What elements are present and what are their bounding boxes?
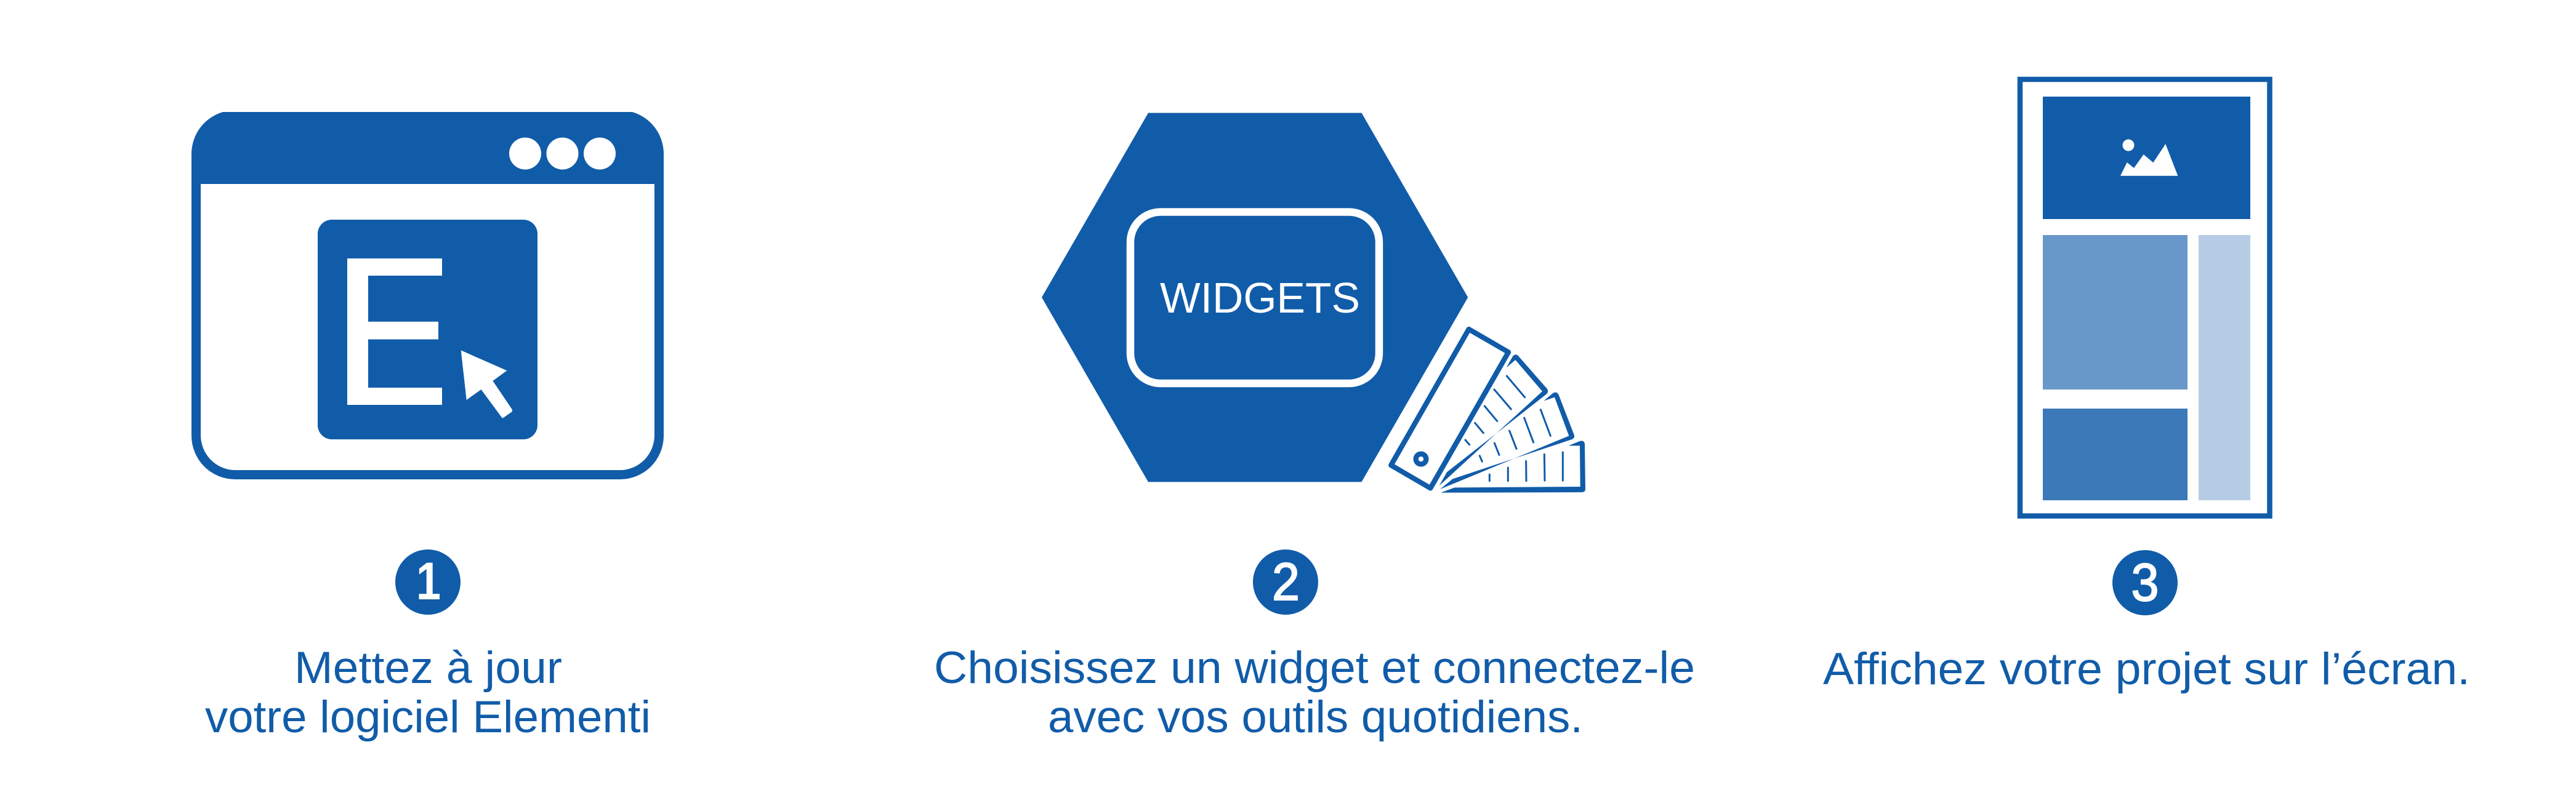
text: step 1 caption [205,643,651,742]
text: step 1 caption: Mettez à jour [294,643,562,693]
text: step 2 caption [934,643,1695,742]
icon: widgets hexagon: WIDGETS [1160,274,1360,322]
icon: screen layout [2020,79,2269,516]
step number 1 [395,549,461,615]
text: step 2 caption: avec vos outils quotidiens. [1048,692,1583,742]
step number 3 [2112,550,2178,615]
step number 1: 1 [416,552,441,611]
text: step 1 caption: votre logiciel Elementi [205,692,651,742]
step number 2: 2 [1272,553,1300,612]
panel: step 2 choose widget [934,113,1695,742]
panel: step 1 update software [191,112,664,742]
step number 3: 3 [2131,553,2159,612]
text: step 2 caption: Choisissez un widget et connectez-le [934,643,1695,693]
icon: browser window [191,112,664,479]
text: step 3 caption: Affichez votre projet sur l’écran. [1823,644,2470,694]
icon: widgets hexagon [1042,113,1468,482]
icon: colour swatch fan [1391,329,1585,493]
icon: Elementi logo with cursor [318,220,537,439]
panel: step 3 display on screen [1823,79,2470,694]
step number 2 [1253,549,1318,615]
